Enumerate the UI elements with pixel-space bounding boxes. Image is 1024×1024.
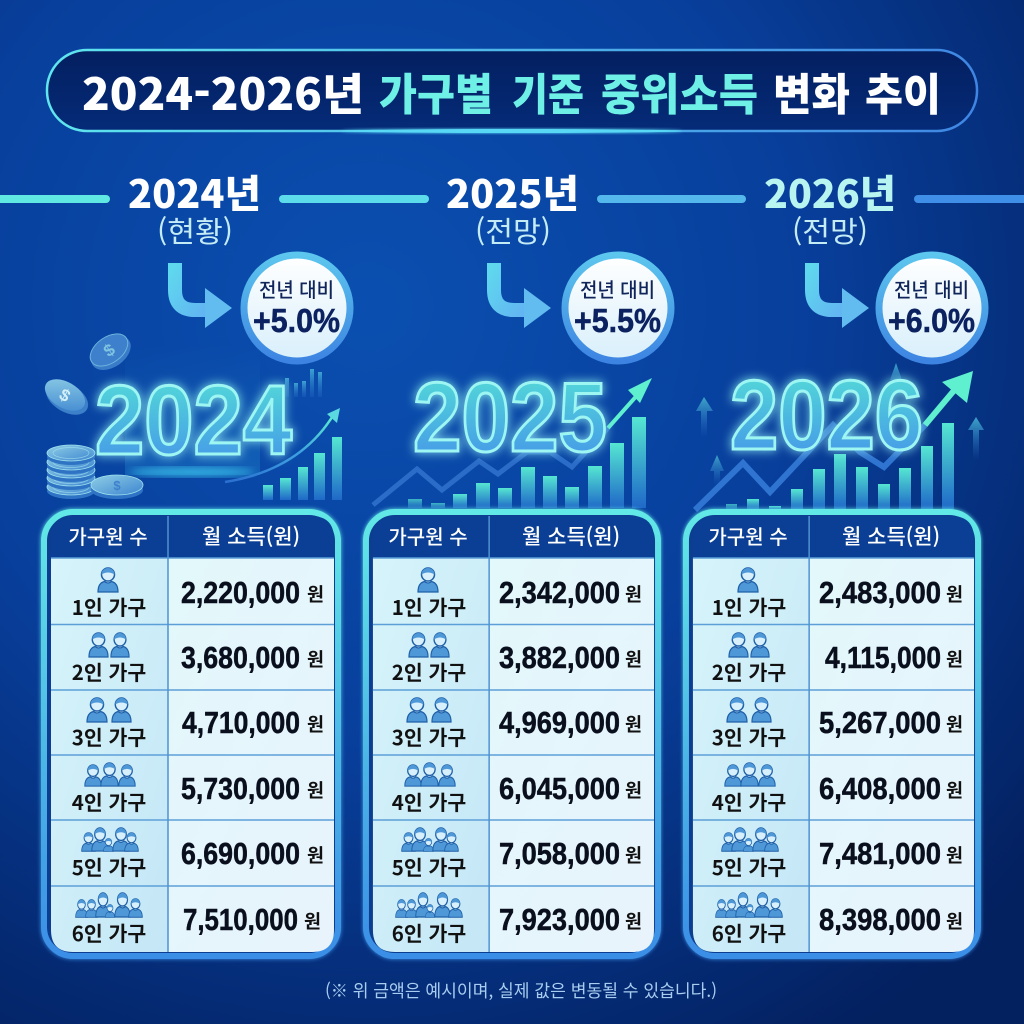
row: 1인 가구: 2,483,000 bbox=[819, 575, 941, 610]
row: 4인 가구: 5,730,000 bbox=[181, 771, 300, 806]
illustration: 2024 coins and bars: $ bbox=[56, 385, 74, 406]
row: 5인 가구: 원 bbox=[307, 842, 324, 868]
row: 5인 가구 bbox=[712, 828, 963, 881]
title banner: 변화 bbox=[773, 59, 850, 123]
footnote: (※ 위 금액은 예시이며, 실제 값은 변동될 수 있습니다.) bbox=[325, 978, 717, 1003]
row: 2인 가구: 원 bbox=[307, 646, 324, 672]
year heading: 2026: 2026년 bbox=[764, 164, 896, 220]
row: 4인 가구: 원 bbox=[625, 777, 642, 803]
row: 2인 가구: 2인 가구 bbox=[712, 656, 786, 686]
badge: 2024 growth: 전년 대비 bbox=[259, 274, 334, 303]
row: 1인 가구: 2,342,000 bbox=[499, 575, 620, 610]
row: 4인 가구 bbox=[392, 763, 642, 816]
title banner: 추이 bbox=[865, 59, 941, 123]
row: 2인 가구 bbox=[712, 633, 963, 686]
row: 6인 가구: 6인 가구 bbox=[712, 917, 786, 947]
year heading: 2024: 2024년 bbox=[128, 164, 261, 220]
big number: 2026: 2026 bbox=[730, 360, 923, 470]
row: 5인 가구: 5인 가구 bbox=[712, 851, 786, 881]
row: 2인 가구: 원 bbox=[946, 646, 963, 672]
badge: 2025 growth: +5.5% bbox=[574, 302, 661, 339]
chart: 2025 bars and trend bbox=[373, 378, 652, 508]
badge: 2024 growth: +5.0% bbox=[253, 302, 340, 339]
year heading: 2025 bbox=[446, 164, 579, 251]
row: 1인 가구: 1인 가구 bbox=[392, 591, 466, 621]
arrow: 2024 to badge bbox=[175, 263, 232, 328]
row: 2인 가구: 4,115,000 bbox=[825, 640, 941, 675]
row: 4인 가구: 6,408,000 bbox=[819, 771, 941, 806]
row: 6인 가구: 7,923,000 bbox=[499, 902, 620, 937]
row: 1인 가구 bbox=[392, 568, 642, 621]
badge: 2025 growth bbox=[565, 255, 671, 361]
table: 2026 income: 월 소득(원) bbox=[842, 521, 940, 551]
badge: 2026 growth bbox=[879, 255, 985, 361]
title banner: 2024-2026년 bbox=[82, 59, 364, 123]
table: 2024 income: 가구원 수 bbox=[68, 521, 148, 550]
title banner bbox=[47, 50, 977, 133]
year heading: 2024: (현황) bbox=[157, 209, 233, 251]
badge: 2026 growth: 전년 대비 bbox=[894, 274, 969, 303]
row: 4인 가구: 원 bbox=[307, 777, 324, 803]
row: 6인 가구: 원 bbox=[304, 908, 321, 934]
row: 3인 가구: 원 bbox=[307, 711, 324, 737]
row: 2인 가구: 3,680,000 bbox=[181, 640, 300, 675]
illustration: 2024 coins and bars: $ bbox=[100, 340, 119, 361]
row: 1인 가구: 1인 가구 bbox=[712, 591, 786, 621]
row: 6인 가구 bbox=[72, 893, 321, 947]
row: 4인 가구 bbox=[712, 763, 963, 816]
table: 2024 income: 월 소득(원) bbox=[202, 521, 300, 551]
row: 5인 가구: 7,058,000 bbox=[499, 836, 620, 871]
table: 2025 income: 가구원 수 bbox=[388, 521, 468, 550]
row: 6인 가구: 6인 가구 bbox=[72, 917, 146, 947]
big number: 2024: 2024 bbox=[95, 365, 292, 475]
illustration: 2024 coins and bars bbox=[39, 327, 342, 500]
title banner: 기준 bbox=[512, 59, 584, 123]
year heading: 2026: (전망) bbox=[792, 209, 868, 251]
row: 5인 가구: 7,481,000 bbox=[819, 836, 941, 871]
year heading: 2025: (전망) bbox=[475, 209, 551, 251]
table: 2025 income: 월 소득(원) bbox=[522, 521, 620, 551]
year heading: 2024 bbox=[128, 164, 261, 251]
row: 1인 가구: 원 bbox=[946, 581, 963, 607]
timeline line bbox=[0, 195, 1024, 203]
row: 1인 가구: 원 bbox=[307, 581, 324, 607]
row: 2인 가구 bbox=[72, 633, 324, 686]
row: 6인 가구: 8,398,000 bbox=[819, 902, 941, 937]
row: 3인 가구: 3인 가구 bbox=[392, 721, 466, 751]
illustration: 2024 coins and bars: $ bbox=[113, 478, 121, 493]
row: 1인 가구: 1인 가구 bbox=[72, 591, 146, 621]
row: 5인 가구: 6,690,000 bbox=[181, 836, 300, 871]
row: 6인 가구 bbox=[392, 893, 642, 947]
year heading: 2025: 2025년 bbox=[446, 164, 579, 220]
row: 1인 가구 bbox=[72, 568, 324, 621]
row: 3인 가구: 원 bbox=[625, 711, 642, 737]
row: 6인 가구: 원 bbox=[625, 908, 642, 934]
row: 3인 가구 bbox=[72, 698, 324, 751]
row: 4인 가구 bbox=[72, 763, 324, 816]
row: 2인 가구: 2인 가구 bbox=[72, 656, 146, 686]
row: 1인 가구: 원 bbox=[625, 581, 642, 607]
arrow: 2026 to badge bbox=[812, 263, 869, 328]
row: 4인 가구: 4인 가구 bbox=[712, 786, 786, 816]
chart: 2026 bars, trend and arrows bbox=[695, 363, 984, 510]
table: 2025 income bbox=[366, 512, 658, 956]
row: 6인 가구 bbox=[712, 893, 963, 947]
row: 3인 가구: 5,267,000 bbox=[819, 705, 941, 740]
row: 3인 가구 bbox=[392, 698, 642, 751]
row: 4인 가구: 4인 가구 bbox=[72, 786, 146, 816]
row: 2인 가구: 원 bbox=[625, 646, 642, 672]
row: 4인 가구: 4인 가구 bbox=[392, 786, 466, 816]
row: 3인 가구: 4,710,000 bbox=[182, 705, 300, 740]
year heading: 2026 bbox=[764, 164, 896, 251]
row: 5인 가구 bbox=[72, 828, 324, 881]
title banner: 가구별 bbox=[379, 59, 493, 123]
row: 5인 가구: 원 bbox=[946, 842, 963, 868]
row: 3인 가구: 3인 가구 bbox=[72, 721, 146, 751]
row: 5인 가구: 5인 가구 bbox=[72, 851, 146, 881]
row: 3인 가구 bbox=[712, 698, 963, 751]
row: 6인 가구: 6인 가구 bbox=[392, 917, 466, 947]
row: 4인 가구: 원 bbox=[946, 777, 963, 803]
table: 2024 income bbox=[44, 512, 338, 956]
row: 2인 가구 bbox=[392, 633, 642, 686]
table: 2026 income bbox=[686, 512, 978, 956]
row: 3인 가구: 4,969,000 bbox=[499, 705, 620, 740]
row: 3인 가구: 원 bbox=[946, 711, 963, 737]
table: 2026 income: 가구원 수 bbox=[708, 521, 788, 550]
row: 2인 가구: 3,882,000 bbox=[499, 640, 620, 675]
badge: 2025 growth: 전년 대비 bbox=[580, 274, 655, 303]
row: 5인 가구: 원 bbox=[625, 842, 642, 868]
row: 6인 가구: 원 bbox=[946, 908, 963, 934]
row: 2인 가구: 2인 가구 bbox=[392, 656, 466, 686]
row: 1인 가구 bbox=[712, 568, 963, 621]
row: 1인 가구: 2,220,000 bbox=[181, 575, 300, 610]
row: 6인 가구: 7,510,000 bbox=[183, 902, 298, 937]
arrow: 2025 to badge bbox=[494, 263, 551, 328]
row: 5인 가구 bbox=[392, 828, 642, 881]
row: 5인 가구: 5인 가구 bbox=[392, 851, 466, 881]
title banner: 중위소득 bbox=[601, 59, 758, 123]
badge: 2024 growth bbox=[244, 255, 350, 361]
big number: 2025: 2025 bbox=[413, 362, 607, 472]
badge: 2026 growth: +6.0% bbox=[888, 302, 975, 339]
row: 4인 가구: 6,045,000 bbox=[499, 771, 620, 806]
row: 3인 가구: 3인 가구 bbox=[712, 721, 786, 751]
